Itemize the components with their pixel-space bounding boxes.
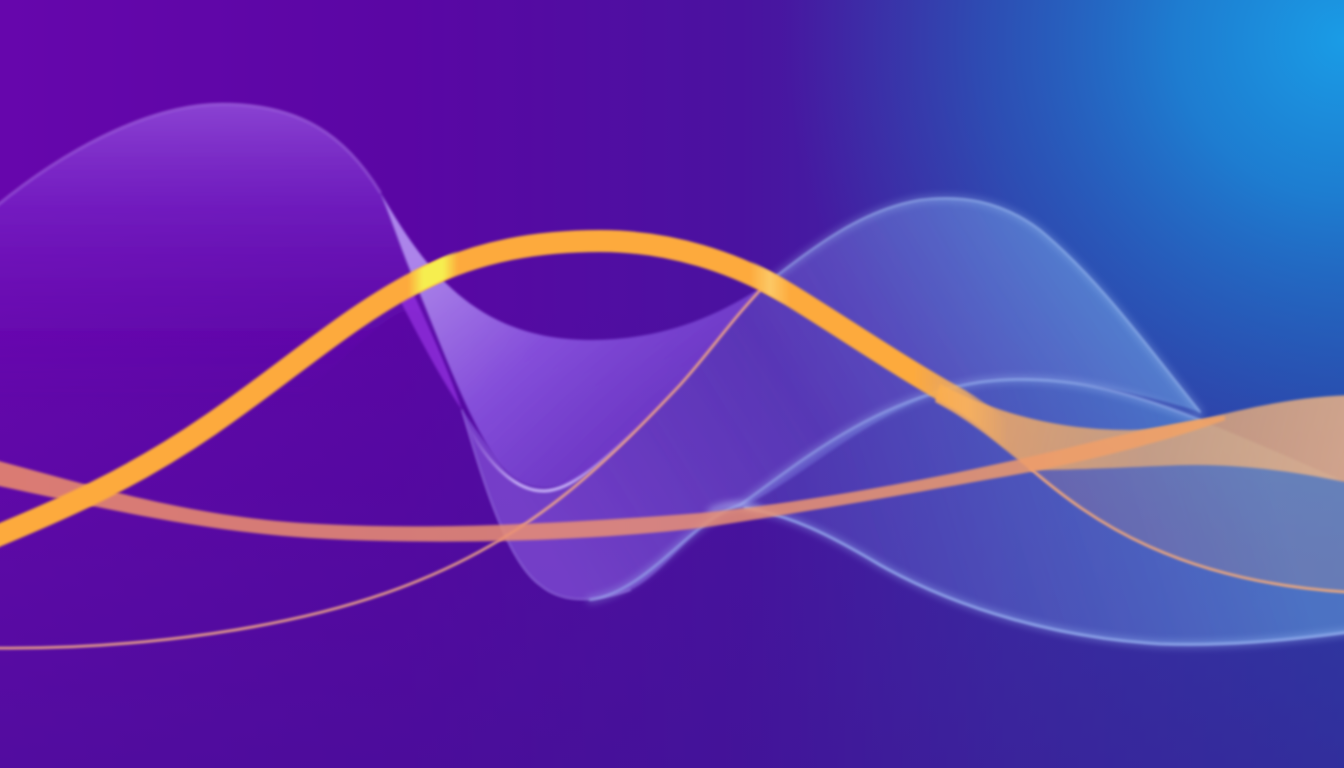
peach ribbon on the right [935,384,1344,593]
lower blue ribbon [590,379,1344,644]
yellow overlap highlight [400,260,462,291]
band crossing highlight [745,269,795,298]
main thick orange band [0,241,1020,541]
ribbon edge highlights [0,104,1344,644]
thin orange line [0,280,1344,648]
blue translucent ribbon [462,198,1200,599]
secondary salmon band [0,416,1225,542]
violet translucent ribbon [0,104,765,488]
